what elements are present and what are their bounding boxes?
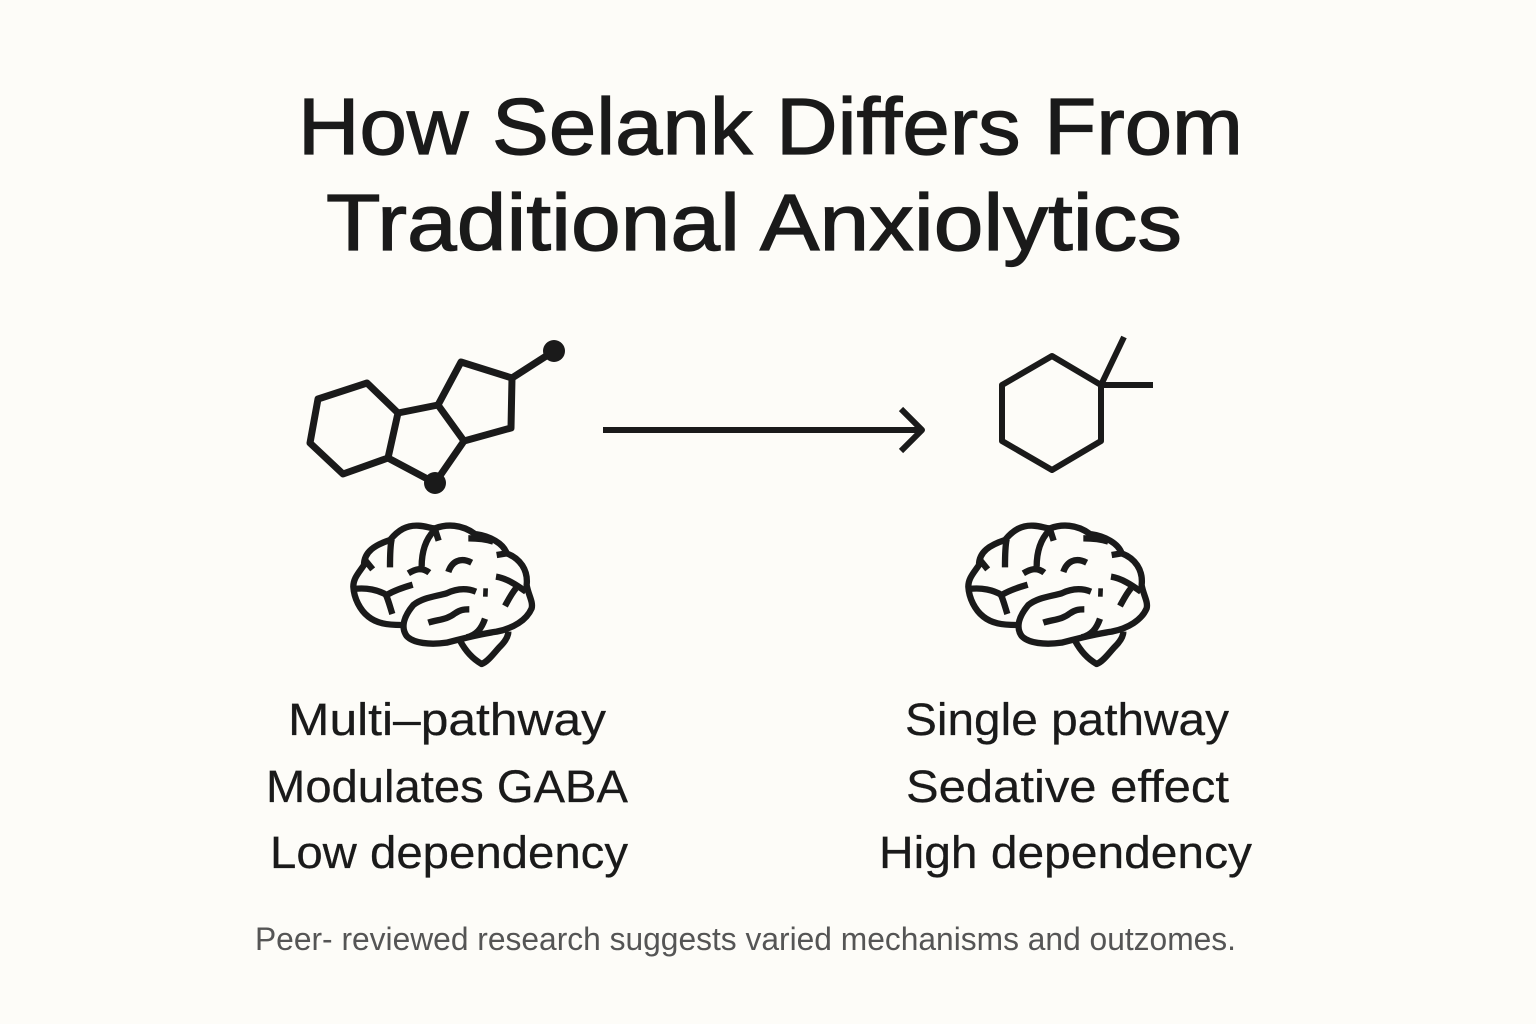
text block: traditional anxiolytic properties: High dependency bbox=[879, 827, 1253, 878]
icon: traditional anxiolytic hexagon molecule bbox=[1002, 337, 1153, 470]
title bbox=[298, 82, 1243, 267]
title: Traditional Anxiolytics bbox=[326, 178, 1182, 267]
icon: brain left bbox=[353, 526, 532, 664]
text block: Selank properties bbox=[266, 694, 629, 878]
footnote: Peer- reviewed research suggests varied mechanisms and outzomes. bbox=[255, 921, 1236, 957]
text block: Selank properties: Low dependency bbox=[270, 827, 629, 878]
icon: Selank multi-ring molecule bbox=[310, 340, 565, 494]
text block: traditional anxiolytic properties: Sedative effect bbox=[906, 761, 1230, 812]
arrow: comparison bbox=[603, 409, 922, 451]
text block: traditional anxiolytic properties: Single pathway bbox=[905, 694, 1230, 745]
title: How Selank Differs From bbox=[298, 82, 1243, 171]
text block: traditional anxiolytic properties bbox=[879, 694, 1253, 878]
text block: Selank properties: Multi–pathway bbox=[288, 694, 607, 745]
icon: brain right bbox=[968, 526, 1147, 664]
text block: Selank properties: Modulates GABA bbox=[266, 761, 628, 812]
